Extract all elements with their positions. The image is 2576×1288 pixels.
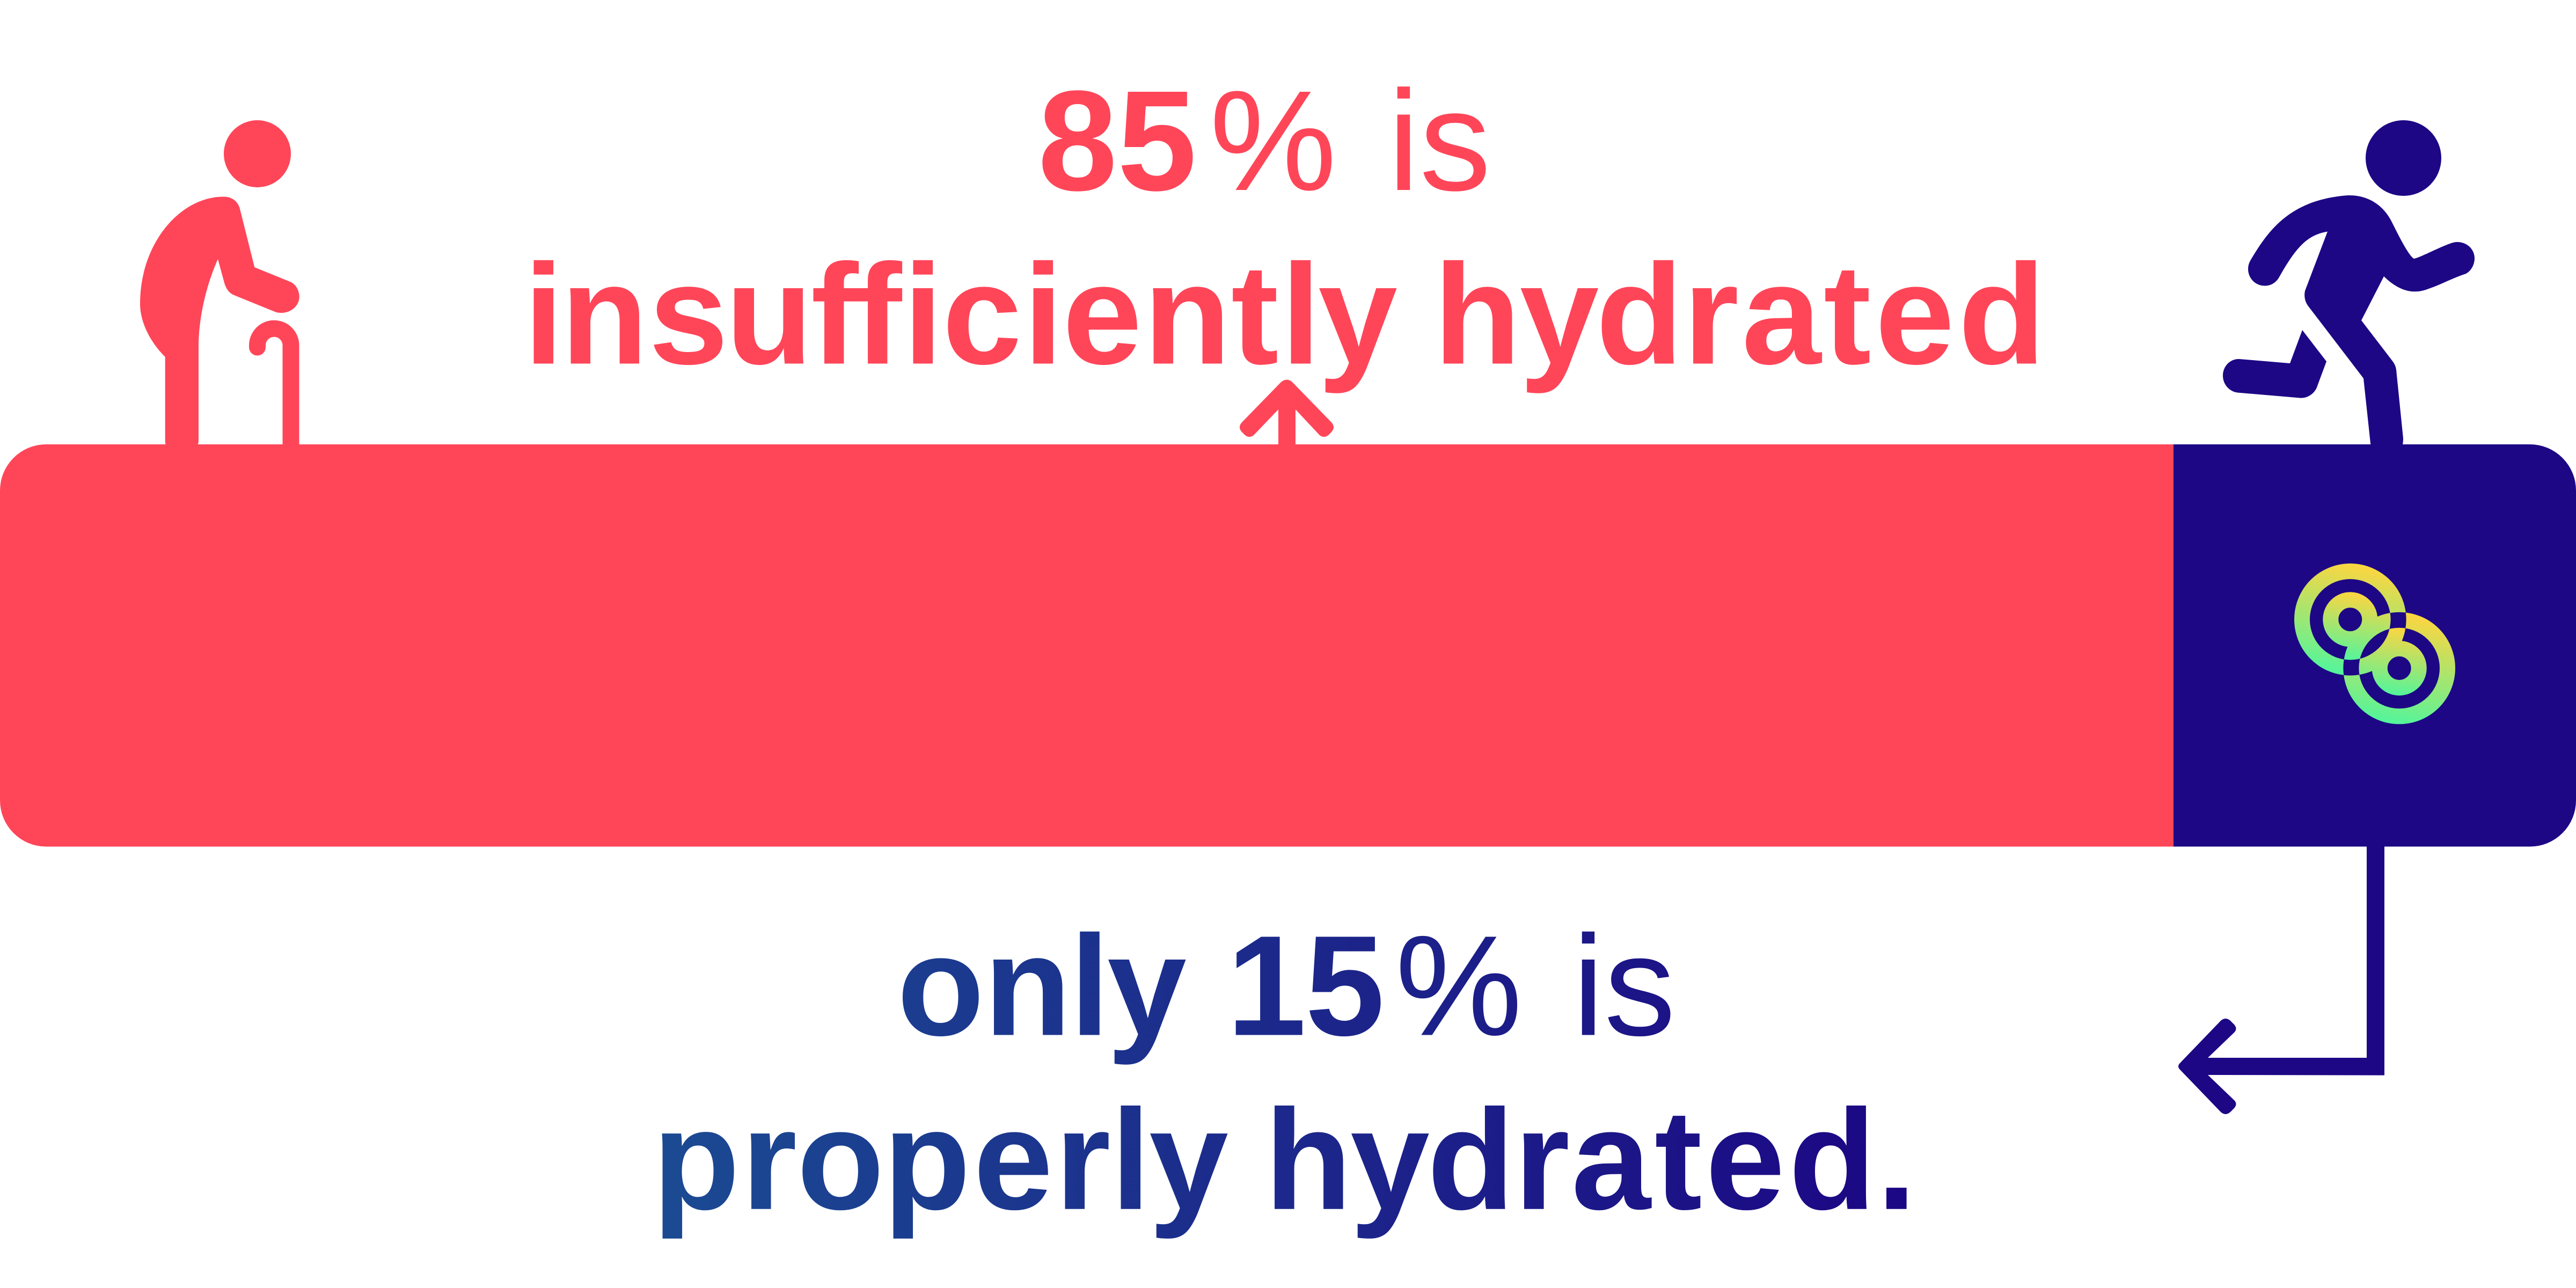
text: only 15% is: 15 [1227, 906, 1385, 1066]
arrow: up to heading [1240, 380, 1334, 445]
icon: interlocking rings logo [2302, 571, 2448, 716]
head [224, 120, 291, 187]
back leg [2223, 330, 2326, 398]
text: 85% is: is [1388, 61, 1491, 221]
text: 85% is: 85 [1038, 61, 1197, 221]
head [2366, 120, 2441, 196]
text: only 15% is: is [1572, 906, 1675, 1066]
bar segment: 15% properly hydrated [2174, 444, 2576, 847]
icon: elderly person with cane [140, 120, 299, 445]
text: insufficiently hydrated: hydrated [1434, 235, 2045, 395]
arrow: from bar to lower text [2178, 845, 2384, 1114]
heading: only 15% is properly hydrated. [653, 906, 1916, 1240]
torso, arms and front leg [2248, 195, 2475, 447]
body [140, 196, 299, 445]
icon: running person [2223, 120, 2475, 447]
heading: 85% is insufficiently hydrated [524, 61, 2045, 395]
text: 85% is: % [1210, 61, 1337, 221]
text: only 15% is: % [1395, 906, 1523, 1066]
cane [258, 328, 291, 445]
bar segment: 85% insufficiently hydrated [0, 444, 2174, 847]
text: properly hydrated.: properly [653, 1080, 1230, 1240]
text: properly hydrated.: hydrated. [1264, 1080, 1916, 1240]
text: only 15% is: only [897, 906, 1188, 1066]
chart: proportion bar [0, 444, 2576, 847]
text: insufficiently hydrated: insufficiently [524, 235, 1399, 395]
